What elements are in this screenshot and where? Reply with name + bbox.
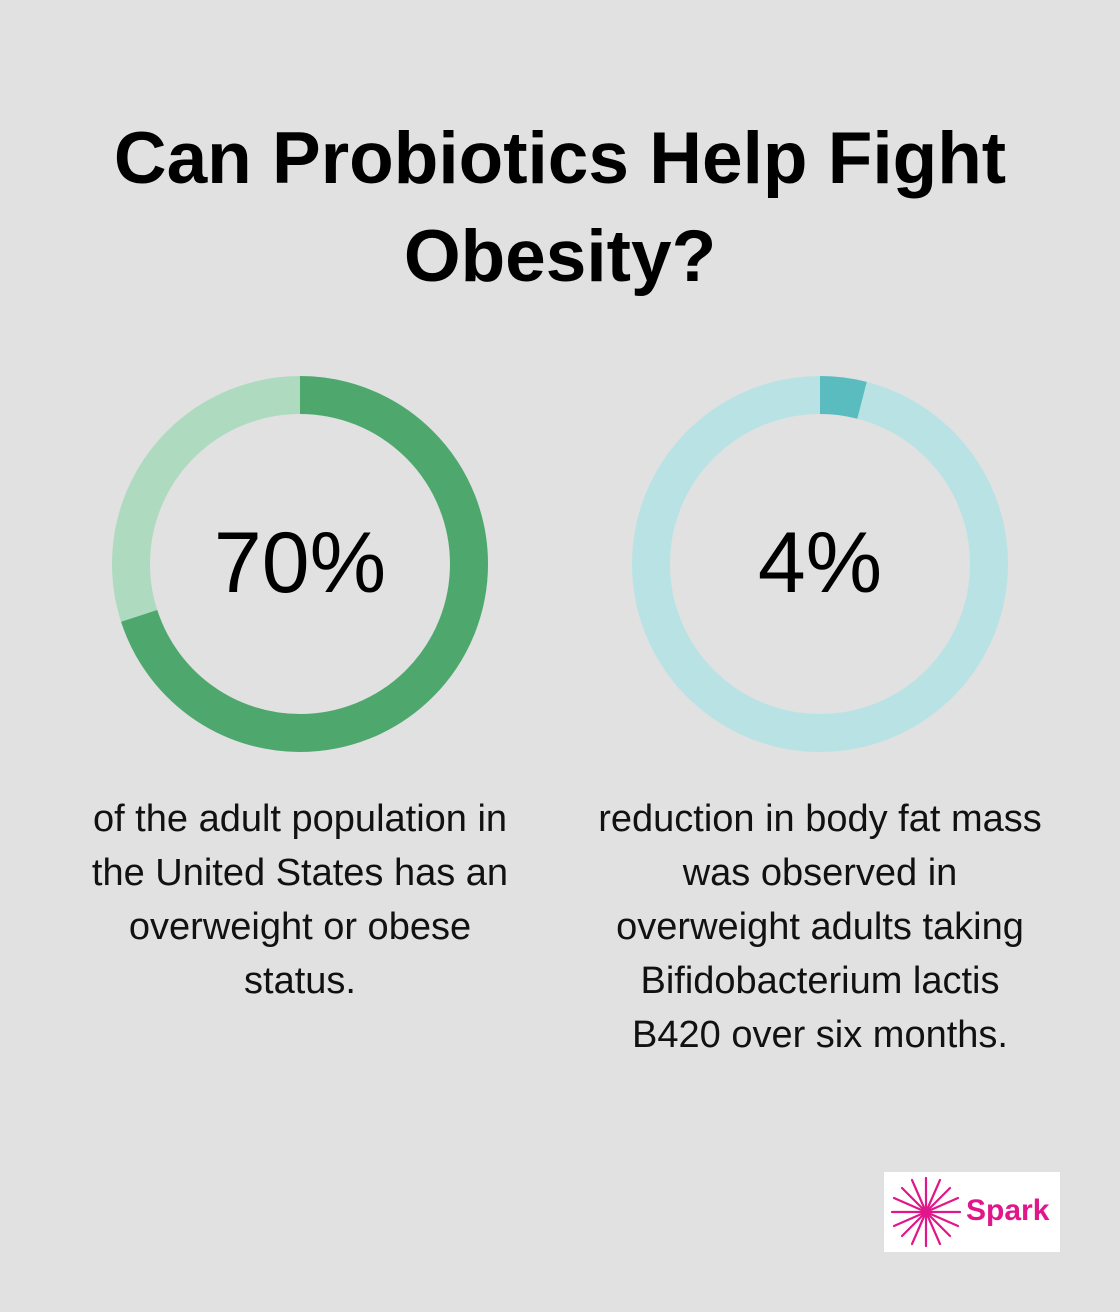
text: 4% description: reduction in body fat mass <box>598 798 1042 840</box>
text: 70% description: the United States has an <box>92 852 508 894</box>
title <box>114 118 1006 297</box>
text: 4% description <box>598 798 1042 1056</box>
donut chart: 4%: 4% <box>758 515 882 611</box>
text: 4% description: overweight adults taking <box>616 906 1024 948</box>
title: Obesity? <box>404 216 716 297</box>
donut chart: 70%: 70% <box>214 515 386 611</box>
donut chart: 70% <box>112 376 488 752</box>
text: 4% description: B420 over six months. <box>632 1014 1008 1056</box>
text: 70% description: of the adult population in <box>93 798 507 840</box>
text: 70% description <box>92 798 508 1002</box>
text: 70% description: overweight or obese <box>129 906 471 948</box>
logo text: Spark <box>966 1194 1049 1227</box>
logo: Spark <box>884 1172 1060 1252</box>
donut chart: 4% <box>632 376 1008 752</box>
text: 4% description: was observed in <box>683 852 957 894</box>
text: 4% description: Bifidobacterium lactis <box>640 960 1000 1002</box>
title: Can Probiotics Help Fight <box>114 118 1006 199</box>
text: 70% description: status. <box>244 960 356 1002</box>
icon: spark burst <box>890 1176 962 1248</box>
